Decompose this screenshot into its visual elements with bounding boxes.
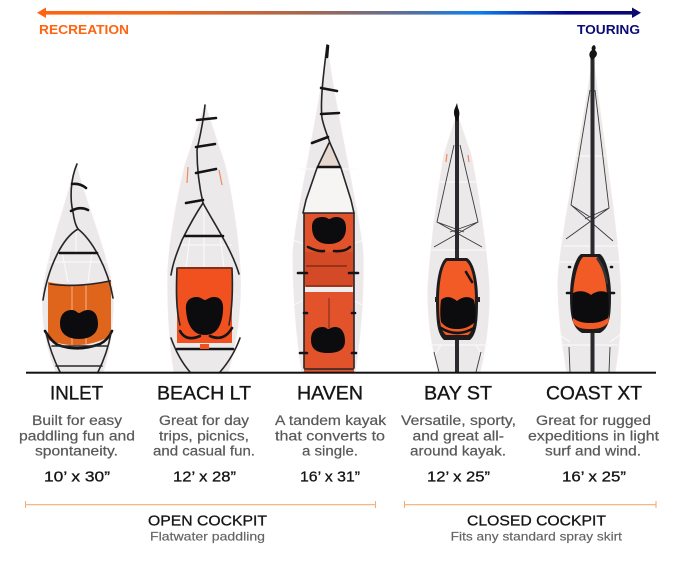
kayak: Haven [293, 44, 363, 372]
column: Coast XT: expeditions in light [528, 428, 659, 444]
kayak: Coast XT [558, 45, 621, 372]
heading: closed cockpit: Fits any standard spray skirt [451, 530, 623, 544]
column: Coast XT: COAST XT [546, 384, 642, 404]
ground line [26, 372, 656, 374]
heading: open cockpit: OPEN COCKPIT [148, 513, 267, 530]
label: touring: TOURING [577, 23, 640, 37]
heading: open cockpit [148, 513, 267, 544]
kayak: Bay ST [428, 103, 489, 372]
column: Coast XT: surf and wind. [545, 444, 641, 458]
column: Beach LT: and casual fun. [153, 444, 255, 458]
column: Coast XT: Great for rugged [536, 413, 651, 428]
column: Haven: HAVEN [297, 384, 363, 404]
column: Haven: 16’ x 31” [300, 470, 360, 486]
label: recreation: RECREATION [39, 23, 129, 37]
spectrum arrow: recreation to touring [37, 8, 641, 18]
heading: closed cockpit [451, 513, 623, 544]
column: Bay ST: around kayak. [410, 444, 506, 458]
column: Coast XT [528, 384, 659, 486]
column: Bay ST: BAY ST [424, 384, 492, 404]
column: Beach LT: 12’ x 28” [173, 470, 236, 486]
column: Bay ST: Versatile, sporty, [401, 413, 516, 428]
kayak: Inlet [43, 164, 113, 372]
kayak: Beach LT [168, 105, 240, 372]
heading: closed cockpit: CLOSED COCKPIT [467, 513, 606, 530]
column: Bay ST: 12’ x 25” [427, 470, 490, 486]
column: Inlet: Built for easy [32, 413, 122, 428]
column: Beach LT: trips, picnics, [159, 428, 249, 444]
column: Haven: a single. [302, 444, 358, 458]
column: Beach LT [153, 384, 255, 486]
column: Beach LT: Great for day [159, 413, 249, 428]
column: Inlet: spontaneity. [35, 444, 118, 458]
column: Inlet: 10’ x 30” [44, 470, 110, 486]
bracket: open cockpit [26, 501, 376, 508]
column: Inlet: INLET [50, 384, 103, 404]
column: Haven [275, 384, 386, 486]
heading: open cockpit: Flatwater paddling [150, 530, 265, 544]
column: Inlet [19, 384, 135, 486]
column: Beach LT: BEACH LT [157, 384, 251, 404]
column: Bay ST: and great all- [412, 428, 504, 444]
bracket: closed cockpit [404, 501, 656, 508]
column: Haven: that converts to [275, 428, 385, 444]
column: Coast XT: 16’ x 25” [562, 470, 626, 486]
column: Bay ST [401, 384, 516, 486]
column: Haven: A tandem kayak [275, 413, 386, 428]
column: Inlet: paddling fun and [19, 428, 135, 444]
